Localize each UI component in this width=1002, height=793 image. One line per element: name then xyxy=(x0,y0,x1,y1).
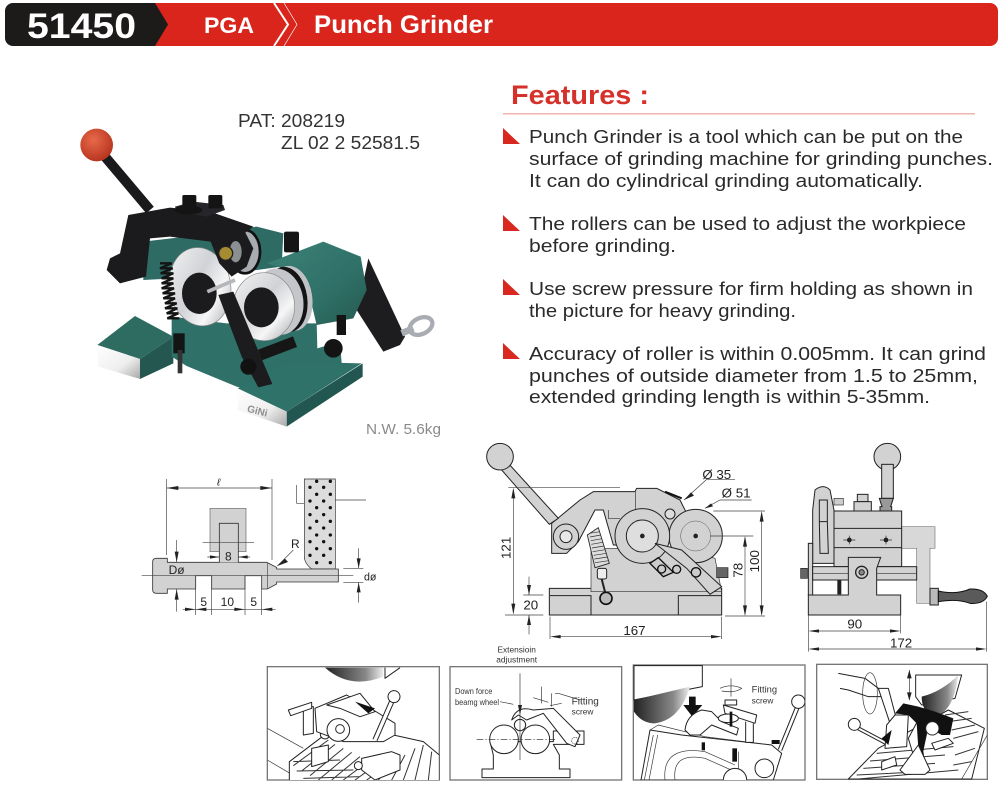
top bolt xyxy=(854,494,871,511)
frame xyxy=(267,667,439,780)
labels: Fitting xyxy=(572,696,599,707)
dimension labels: ℓ xyxy=(216,477,221,488)
lever stem xyxy=(882,464,893,498)
hex bolts xyxy=(174,195,222,214)
feature 2: before grinding. xyxy=(529,235,676,256)
feature 4: extended grinding length is within 5-35mm. xyxy=(529,386,930,407)
right silver roller xyxy=(233,273,295,341)
usage panel 3 xyxy=(633,665,805,792)
stud xyxy=(746,722,753,742)
fitting marks xyxy=(500,687,580,707)
product photo: punch grinder xyxy=(80,129,435,427)
bullet xyxy=(503,128,520,144)
bullet xyxy=(503,279,520,295)
table xyxy=(848,710,984,779)
ball knob xyxy=(487,443,513,470)
labels: beamg wheel xyxy=(455,697,499,707)
bolt head xyxy=(725,700,737,705)
black arrow mark xyxy=(355,702,375,713)
features heading: Features : xyxy=(511,80,649,110)
dimension arrows xyxy=(808,629,987,651)
feature 3 xyxy=(503,278,973,321)
side bolts xyxy=(173,315,346,358)
ball knob xyxy=(848,718,860,730)
base xyxy=(808,557,901,615)
lever xyxy=(858,728,887,743)
silver crank handle xyxy=(402,314,435,338)
clamp screw xyxy=(834,498,843,505)
arrows xyxy=(720,678,742,697)
red ball knob xyxy=(80,129,113,161)
punch body xyxy=(153,558,338,593)
left knob xyxy=(801,568,807,578)
lower screw bar xyxy=(260,342,295,355)
guard xyxy=(916,675,962,705)
caption above xyxy=(496,644,538,664)
workpiece pin xyxy=(207,280,235,292)
labels: Down force xyxy=(455,686,493,696)
right table edge xyxy=(962,735,987,779)
wheel guard xyxy=(634,666,702,700)
table slots xyxy=(857,712,978,779)
dimension labels: 78 xyxy=(730,563,745,578)
patent numbers xyxy=(238,110,420,153)
right cylinder housing xyxy=(267,242,367,325)
wheel inner slot xyxy=(819,500,828,553)
dimension labels: Ø 35 xyxy=(702,467,731,482)
centre lines xyxy=(142,542,353,588)
crank handle xyxy=(288,702,312,716)
lever nut xyxy=(879,498,893,511)
logo on base: GiNi xyxy=(246,404,269,420)
top black mark xyxy=(665,492,682,498)
punch dimension diagram xyxy=(142,477,377,615)
dimension labels: 121 xyxy=(499,537,514,559)
feature 4: punches of outside diameter from 1.5 to 25mm, xyxy=(529,365,978,386)
clamp bar xyxy=(655,543,722,594)
brass screw xyxy=(219,246,233,260)
dimension labels: 167 xyxy=(623,623,646,638)
dimension labels xyxy=(847,616,912,651)
feature 2: The rollers can be used to adjust the workpiece xyxy=(529,213,966,234)
right roller xyxy=(669,509,722,563)
right roller back bands xyxy=(249,263,317,338)
left roller hub xyxy=(182,273,217,314)
panel 4 artwork xyxy=(838,670,987,779)
spring coils xyxy=(589,532,609,563)
bullet xyxy=(503,215,520,231)
spring xyxy=(160,263,179,318)
oval recess xyxy=(718,714,738,723)
frame xyxy=(633,665,805,780)
pivot xyxy=(572,737,578,744)
dimension labels: R xyxy=(291,537,300,551)
front black clamp bar xyxy=(218,292,272,387)
base blocks xyxy=(882,745,930,774)
crank arm xyxy=(303,707,313,735)
mounting crosses xyxy=(843,536,892,544)
crank arm xyxy=(357,258,405,352)
feature 4: Accuracy of roller is within 0.005mm. It can grind xyxy=(529,343,986,364)
front arm xyxy=(908,713,930,755)
crank arm xyxy=(878,688,897,723)
table slots xyxy=(293,740,432,780)
side view dimension drawing xyxy=(487,443,765,639)
lever xyxy=(375,702,392,740)
grinder body xyxy=(315,695,395,742)
feature 2 xyxy=(503,213,966,256)
dimension labels: 100 xyxy=(747,550,762,572)
feature 3: Use screw pressure for firm holding as shown in xyxy=(529,278,973,299)
wheel side xyxy=(813,487,834,563)
frame xyxy=(817,664,987,779)
clamp arm xyxy=(327,693,375,717)
left silver roller xyxy=(163,243,237,331)
magnetic table xyxy=(289,733,439,782)
right roller hub xyxy=(244,287,279,327)
black shadows xyxy=(882,703,953,770)
dimension labels: 10 xyxy=(221,595,234,609)
caption above: Extensioin xyxy=(497,644,536,654)
bench edges xyxy=(267,728,303,773)
model number: 51450 xyxy=(27,7,136,46)
features divider xyxy=(503,113,975,114)
dimension labels: 8 xyxy=(225,550,232,564)
dimension lines xyxy=(505,479,765,639)
feature 4 xyxy=(503,343,986,407)
wheel guide lines xyxy=(297,485,366,503)
side knob xyxy=(717,568,728,578)
blocks on table xyxy=(312,745,400,780)
ball knob xyxy=(874,443,901,470)
grinder body xyxy=(885,715,908,748)
lower left bolt xyxy=(173,350,187,373)
rollers xyxy=(490,725,518,754)
dimension labels: 5 xyxy=(200,595,207,609)
machine body xyxy=(641,730,782,780)
dimension labels: Ø 51 xyxy=(722,486,751,501)
lower stud xyxy=(833,580,845,594)
dimension labels: 5 xyxy=(250,595,257,609)
dimension labels: dø xyxy=(364,572,377,584)
upper clamp arm xyxy=(552,488,687,553)
dimension labels xyxy=(499,467,762,638)
left base xyxy=(97,316,173,379)
feature 1: It can do cylindrical grinding automatically. xyxy=(529,170,923,191)
dimension labels: 90 xyxy=(847,616,862,631)
patent numbers: ZL 02 2 52581.5 xyxy=(281,132,420,153)
dimension labels: 172 xyxy=(890,636,912,651)
feature 3: the picture for heavy grinding. xyxy=(529,300,796,321)
roller highlight xyxy=(926,722,939,735)
rear bolt xyxy=(284,232,299,252)
right bracket xyxy=(902,527,935,603)
grinding wheel xyxy=(325,668,383,682)
rear ring xyxy=(230,230,260,273)
left roller xyxy=(327,719,350,741)
right base xyxy=(238,362,363,427)
labels: screw xyxy=(752,695,774,705)
product name: Punch Grinder xyxy=(314,11,493,39)
fitting screw xyxy=(665,509,675,519)
dimension arrows xyxy=(167,486,361,611)
feature 1: Punch Grinder is a tool which can be put on the xyxy=(529,126,963,147)
ring inner highlight xyxy=(230,241,242,262)
body lines xyxy=(644,725,772,780)
dimension arrows xyxy=(511,488,764,638)
net weight: N.W. 5.6kg xyxy=(366,421,441,438)
handle shaft xyxy=(105,157,150,210)
frame xyxy=(450,667,622,780)
spring eye bolt xyxy=(597,568,612,604)
feature 1: surface of grinding machine for grinding punches. xyxy=(529,148,993,169)
grinding wheel xyxy=(304,479,335,569)
extension arrow xyxy=(519,673,521,760)
pivot rings xyxy=(553,524,579,549)
ball knob xyxy=(792,695,805,708)
model code: PGA xyxy=(204,13,254,38)
clamp arm xyxy=(512,708,580,747)
centre line xyxy=(477,738,555,740)
handle xyxy=(502,463,558,524)
bullet xyxy=(503,343,520,359)
rotation arrow xyxy=(863,673,877,714)
back body xyxy=(143,227,283,280)
header black model tab xyxy=(5,3,168,46)
cross bar xyxy=(813,567,917,580)
base xyxy=(549,588,722,615)
header banner xyxy=(5,3,998,46)
grinding wheel xyxy=(634,687,690,723)
dimension labels xyxy=(169,477,377,609)
base xyxy=(482,731,584,778)
front socket bolt xyxy=(240,359,256,375)
panel 3 artwork xyxy=(634,666,805,792)
panel 1 artwork xyxy=(267,668,439,782)
crank handle xyxy=(930,588,987,605)
lever xyxy=(780,705,798,750)
feature 1 xyxy=(503,126,993,191)
clamp arm xyxy=(685,710,738,735)
body block xyxy=(834,511,902,567)
labels xyxy=(455,686,599,716)
usage panel 1 xyxy=(267,667,439,782)
pedestal body xyxy=(172,317,342,400)
upper block xyxy=(210,508,246,552)
punch inner slot xyxy=(219,523,238,562)
dimension labels: Dø xyxy=(169,563,185,577)
dimension lines xyxy=(808,602,987,652)
roller end xyxy=(755,759,774,778)
left plate xyxy=(808,543,813,595)
patent numbers: PAT: 208219 xyxy=(238,110,345,131)
labels: Fitting xyxy=(752,684,777,694)
down arrow xyxy=(683,697,702,717)
spring xyxy=(587,528,609,568)
chevron separator xyxy=(274,3,297,46)
arm joints xyxy=(608,490,635,518)
body lines xyxy=(834,528,902,548)
dimension labels: 20 xyxy=(523,598,538,613)
top plate xyxy=(175,202,225,217)
wheel guard xyxy=(385,668,400,678)
wheel xyxy=(922,675,958,717)
front view dimension drawing xyxy=(801,443,987,652)
hand outline xyxy=(838,673,882,697)
caption above: adjustment xyxy=(496,654,538,664)
ball knob xyxy=(388,691,400,703)
upper black clamp arm xyxy=(107,208,253,283)
bar bolts xyxy=(650,558,701,577)
fitting screw bar xyxy=(723,705,757,723)
labels: screw xyxy=(572,706,594,716)
header red bar xyxy=(150,3,998,46)
left roller xyxy=(615,509,670,563)
wheel grit dots xyxy=(308,480,332,564)
body xyxy=(591,548,722,592)
double arrow xyxy=(909,670,910,700)
centre bolt xyxy=(856,566,868,578)
usage panel 4 xyxy=(817,664,987,779)
workpiece xyxy=(514,719,526,731)
labels xyxy=(752,684,777,705)
dimension lines xyxy=(167,479,363,615)
cross bar line xyxy=(813,572,917,574)
usage panel 2 xyxy=(450,644,622,780)
small black bolts xyxy=(702,740,780,762)
base foot marks xyxy=(550,596,722,615)
